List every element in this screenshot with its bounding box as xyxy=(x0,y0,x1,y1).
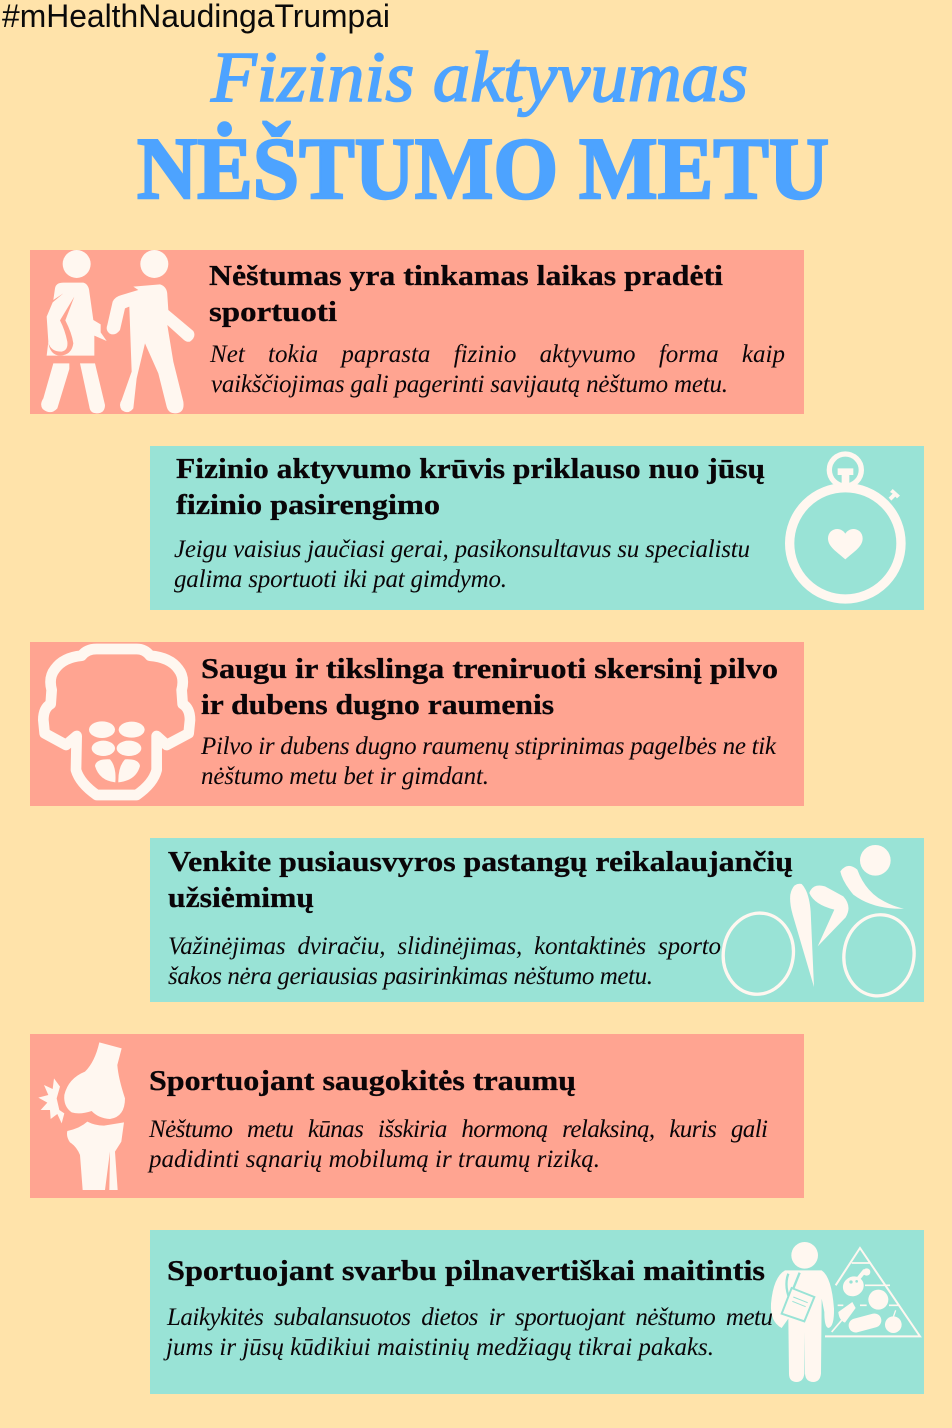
heading line 2: ir dubens dugno raumenis xyxy=(201,690,554,721)
body text line 2: galima sportuoti iki pat gimdymo. xyxy=(174,566,507,593)
title xyxy=(137,37,829,218)
icon: person with food pyramid xyxy=(771,1242,920,1382)
panel: core muscles xyxy=(30,642,804,806)
icon: pregnant woman and man walking xyxy=(41,250,194,413)
icon: stopwatch with heart xyxy=(790,454,901,599)
body text: Nėštumo metu kūnas išskiria hormoną relaksiną, kuris gali xyxy=(148,1116,768,1143)
icon: cyclist xyxy=(718,845,919,1000)
body text: Net tokia paprasta fizinio aktyvumo forma kaip xyxy=(209,341,785,368)
heading: Sportuojant saugokitės traumų xyxy=(149,1066,576,1097)
panel: load xyxy=(150,446,924,610)
heading: Sportuojant svarbu pilnavertiškai maitintis xyxy=(167,1256,765,1287)
heading line 2: užsiėmimų xyxy=(168,883,314,914)
panel: nutrition xyxy=(150,1230,924,1394)
panel: injuries xyxy=(30,1034,804,1198)
title: Fizinis aktyvumas xyxy=(210,37,748,117)
heading: Venkite pusiausvyros pastangų reikalaujančių xyxy=(168,847,793,878)
icon: injured knee xyxy=(38,1042,125,1190)
body text: Pilvo ir dubens dugno raumenų stiprinimas pagelbės ne tik xyxy=(200,733,777,760)
heading: Nėštumas yra tinkamas laikas pradėti xyxy=(209,261,723,292)
body text line 2: nėštumo metu bet ir gimdant. xyxy=(201,763,489,790)
icon: abdominal muscles xyxy=(43,649,190,795)
heading line 2: fizinio pasirengimo xyxy=(176,490,440,521)
panel: balance xyxy=(150,838,924,1002)
body text line 2: jums ir jūsų kūdikiui maistinių medžiagų tikrai pakaks. xyxy=(163,1334,714,1361)
title: NĖŠTUMO METU xyxy=(137,121,829,218)
body text: Važinėjimas dviračiu, slidinėjimas, kontaktinės sporto xyxy=(168,933,721,960)
body text: Jeigu vaisius jaučiasi gerai, pasikonsultavus su specialistu xyxy=(174,536,750,563)
heading: Fizinio aktyvumo krūvis priklauso nuo jūsų xyxy=(176,454,765,485)
body text line 2: padidinti sąnarių mobilumą ir traumų riziką. xyxy=(147,1146,600,1173)
body text line 2: šakos nėra geriausias pasirinkimas nėštumo metu. xyxy=(168,963,653,990)
panel: walking xyxy=(30,250,804,414)
heading: Saugu ir tikslinga treniruoti skersinį pilvo xyxy=(201,654,778,685)
heading line 2: sportuoti xyxy=(209,297,337,328)
body text: Laikykitės subalansuotos dietos ir sportuojant nėštumo metu xyxy=(166,1304,773,1331)
body text line 2: vaikščiojimas gali pagerinti savijautą nėštumo metu. xyxy=(211,371,728,398)
